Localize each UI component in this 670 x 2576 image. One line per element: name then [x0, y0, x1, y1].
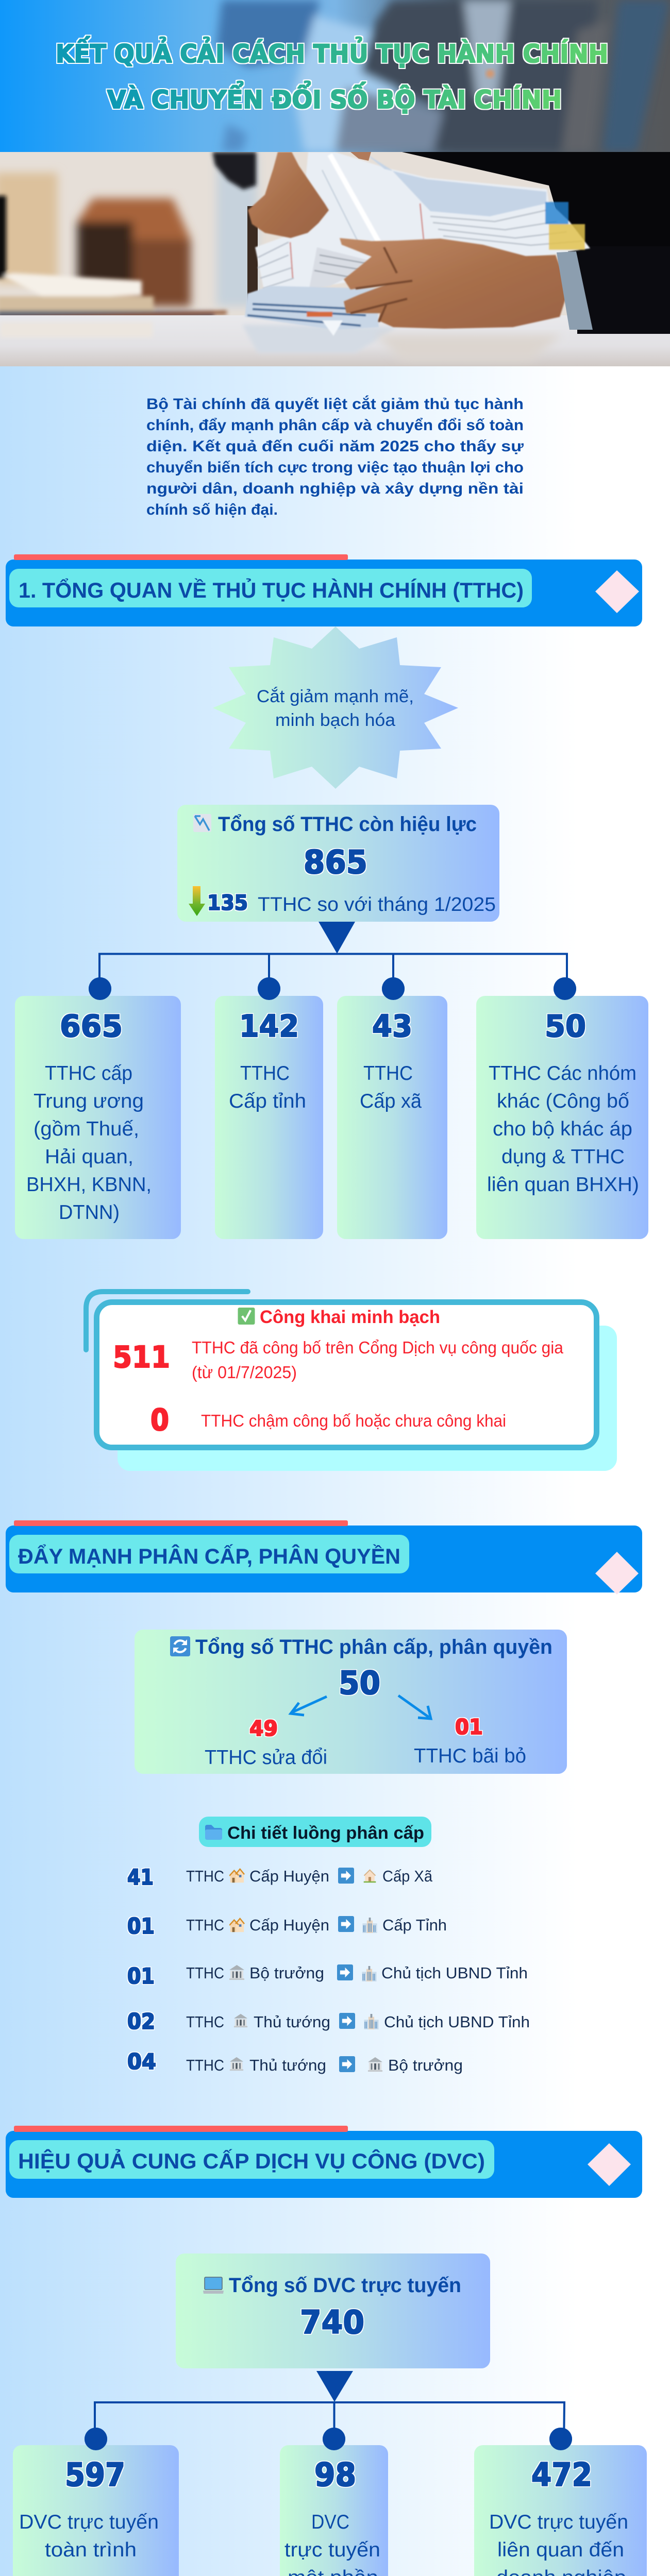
chip: decentralisation flow heading: Chi tiết luồng phân cấp — [227, 1823, 424, 1843]
section heading 2 — [6, 1520, 642, 1595]
left hand — [248, 152, 329, 238]
shirt cuff — [557, 251, 593, 330]
panel: commune level: Cấp xã — [360, 1090, 422, 1112]
photo: hands sorting paper — [0, 152, 670, 367]
panel: other groups: khác (Công bố — [497, 1090, 629, 1112]
row: prime minister to minister: 04 — [127, 2049, 156, 2074]
icon: down arrow — [189, 886, 205, 916]
section heading 2: ĐẨY MẠNH PHÂN CẤP, PHÂN QUYỀN — [18, 1544, 400, 1568]
section heading 3: HIỆU QUẢ CUNG CẤP DỊCH VỤ CÔNG (DVC) — [18, 2148, 485, 2173]
row: district to commune: 41 — [127, 1865, 154, 1890]
icon: falling chart — [193, 814, 211, 832]
panel: province level: TTHC — [240, 1062, 290, 1084]
icon: laptop — [203, 2277, 224, 2294]
icon: check mark — [238, 1308, 255, 1325]
panel: full online services — [13, 2428, 179, 2576]
panel: full online services: 597 — [65, 2456, 125, 2494]
panel: commune level: TTHC — [363, 1062, 413, 1084]
row: prime minister to provincial chair: Chủ tịch UBND Tỉnh — [384, 2013, 530, 2031]
panel: decentralised procedures: 50 — [339, 1664, 380, 1702]
panel: decentralised procedures: TTHC sửa đổi — [205, 1747, 327, 1769]
panel: other groups: TTHC Các nhóm — [489, 1062, 636, 1084]
row: prime minister to minister: Bộ trưởng — [388, 2056, 463, 2074]
starburst callout — [213, 626, 458, 789]
panel: decentralised procedures: 49 — [249, 1716, 278, 1741]
panel: total procedures in force: TTHC so với tháng 1/2025 — [258, 894, 496, 916]
intro text block: chuyển biến tích cực trong việc tạo thuận lợi cho — [146, 459, 524, 476]
row: prime minister to provincial chair — [127, 2009, 530, 2034]
row: prime minister to minister — [127, 2049, 463, 2074]
row: prime minister to provincial chair: Thủ tướng — [254, 2013, 330, 2031]
row: district to commune: Cấp Huyện — [249, 1867, 329, 1885]
section heading 1: 1. TỔNG QUAN VỀ THỦ TỤC HÀNH CHÍNH (TTHC) — [19, 577, 524, 602]
panel: business services — [474, 2428, 647, 2576]
panel: province level: Cấp tỉnh — [229, 1090, 306, 1112]
panel: full online services: toàn trình — [45, 2539, 137, 2561]
row: district to province: Cấp Huyện — [249, 1916, 329, 1934]
row: minister to provincial chair: Bộ trưởng — [249, 1964, 324, 1982]
panel: business services: DVC trực tuyến — [489, 2511, 628, 2533]
panel: decentralised procedures: 01 — [455, 1715, 483, 1739]
intro text block: diện. Kết quả đến cuối năm 2025 cho thấy sự — [146, 438, 524, 455]
callout: public transparency: TTHC chậm công bố hoặc chưa công khai — [201, 1411, 506, 1430]
row: prime minister to minister: Thủ tướng — [249, 2056, 326, 2074]
panel: other groups: cho bộ khác áp — [493, 1118, 632, 1140]
arrow: right branch — [398, 1696, 431, 1719]
panel: other groups: 50 — [545, 1008, 586, 1044]
title: VÀ CHUYỂN ĐỔI SỐ BỘ TÀI CHÍNH — [107, 81, 562, 114]
panel: commune level: 43 — [372, 1008, 412, 1044]
panel: partial online services — [280, 2428, 388, 2576]
panel: central level — [15, 977, 181, 1239]
callout: public transparency: 0 — [150, 1402, 169, 1437]
panel: business services: 472 — [531, 2456, 592, 2494]
callout: public transparency: Công khai minh bạch — [260, 1307, 440, 1327]
panel: central level: 665 — [60, 1008, 123, 1044]
panel: decentralised procedures: TTHC bãi bỏ — [414, 1745, 526, 1767]
arrow: left branch — [291, 1697, 327, 1715]
panel: total procedures in force — [177, 805, 499, 922]
panel: decentralised procedures — [135, 1630, 567, 1774]
connector tree 2 — [85, 2371, 572, 2450]
row: district to province: 01 — [127, 1913, 155, 1939]
chip: decentralisation flow heading — [199, 1817, 431, 1847]
panel: decentralised procedures: Tổng số TTHC phân cấp, phân quyền — [195, 1636, 552, 1658]
section heading 3 — [6, 2126, 642, 2198]
header tinted band — [0, 0, 670, 152]
row: district to province: Cấp Tỉnh — [382, 1916, 447, 1934]
section heading 1 — [6, 554, 642, 626]
intro text block: Bộ Tài chính đã quyết liệt cắt giảm thủ tục hành — [146, 395, 524, 413]
panel: partial online services: DVC — [311, 2511, 349, 2533]
row: minister to provincial chair: Chủ tịch UBND Tỉnh — [381, 1964, 528, 1982]
panel: central level: DTNN) — [59, 1201, 120, 1224]
icon: refresh — [170, 1636, 190, 1656]
intro text block: người dân, doanh nghiệp và xây dựng nền tài — [146, 480, 524, 497]
panel: province level — [215, 977, 323, 1239]
header banner with photo — [0, 0, 670, 367]
panel: central level: Hải quan, — [45, 1146, 133, 1168]
panel: central level: BHXH, KBNN, — [26, 1174, 152, 1196]
panel: total online services — [176, 2253, 490, 2368]
row: prime minister to provincial chair: TTHC — [186, 2013, 224, 2031]
right hand — [340, 238, 568, 329]
panel: commune level — [337, 977, 447, 1239]
panel: partial online services: trực tuyến — [284, 2539, 380, 2561]
callout: public transparency: (từ 01/7/2025) — [192, 1363, 297, 1382]
paper stack — [254, 152, 591, 289]
panel: other groups: liên quan BHXH) — [487, 1174, 639, 1196]
lower torn papers — [245, 286, 379, 336]
panel: central level: TTHC cấp — [45, 1062, 132, 1084]
row: district to commune — [127, 1865, 433, 1890]
starburst callout: minh bạch hóa — [275, 710, 395, 730]
intro text block: chính, đẩy mạnh phân cấp và chuyển đổi số toàn — [146, 417, 524, 434]
row: minister to provincial chair: 01 — [127, 1963, 155, 1989]
callout: public transparency: TTHC đã công bố trên Cổng Dịch vụ công quốc gia — [192, 1338, 564, 1357]
panel: province level: 142 — [239, 1008, 299, 1044]
row: district to commune: TTHC — [186, 1867, 224, 1885]
row: district to province: TTHC — [186, 1916, 224, 1934]
panel: total procedures in force: 865 — [304, 843, 367, 881]
panel: other groups — [476, 977, 648, 1239]
intro text block — [146, 395, 524, 518]
panel: central level: (gồm Thuế, — [34, 1118, 139, 1140]
row: minister to provincial chair — [127, 1963, 528, 1989]
panel: central level: Trung ương — [34, 1090, 144, 1112]
connector tree 1 — [89, 922, 576, 1000]
panel: full online services: DVC trực tuyến — [19, 2511, 159, 2533]
callout: public transparency: 511 — [113, 1340, 170, 1375]
callout: public transparency — [86, 1292, 617, 1471]
row: minister to provincial chair: TTHC — [186, 1964, 224, 1982]
row: prime minister to provincial chair: 02 — [127, 2009, 155, 2034]
panel: partial online services: 98 — [314, 2456, 356, 2494]
panel: total procedures in force: Tổng số TTHC còn hiệu lực — [218, 813, 477, 836]
row: district to province — [127, 1913, 447, 1939]
starburst callout: Cắt giảm mạnh mẽ, — [257, 687, 414, 706]
title: KẾT QUẢ CẢI CÁCH THỦ TỤC HÀNH CHÍNH — [56, 36, 608, 69]
panel: other groups: dụng & TTHC — [501, 1146, 625, 1168]
row: prime minister to minister: TTHC — [186, 2056, 224, 2074]
panel: total procedures in force: 135 — [207, 891, 248, 915]
row: district to commune: Cấp Xã — [382, 1867, 433, 1885]
intro text block: chính số hiện đại. — [146, 501, 278, 518]
panel: total online services: 740 — [300, 2303, 364, 2341]
title — [56, 36, 608, 114]
panel: total online services: Tổng số DVC trực tuyến — [229, 2274, 461, 2297]
icon: folder — [205, 1825, 222, 1840]
panel: business services: liên quan đến — [497, 2539, 624, 2561]
